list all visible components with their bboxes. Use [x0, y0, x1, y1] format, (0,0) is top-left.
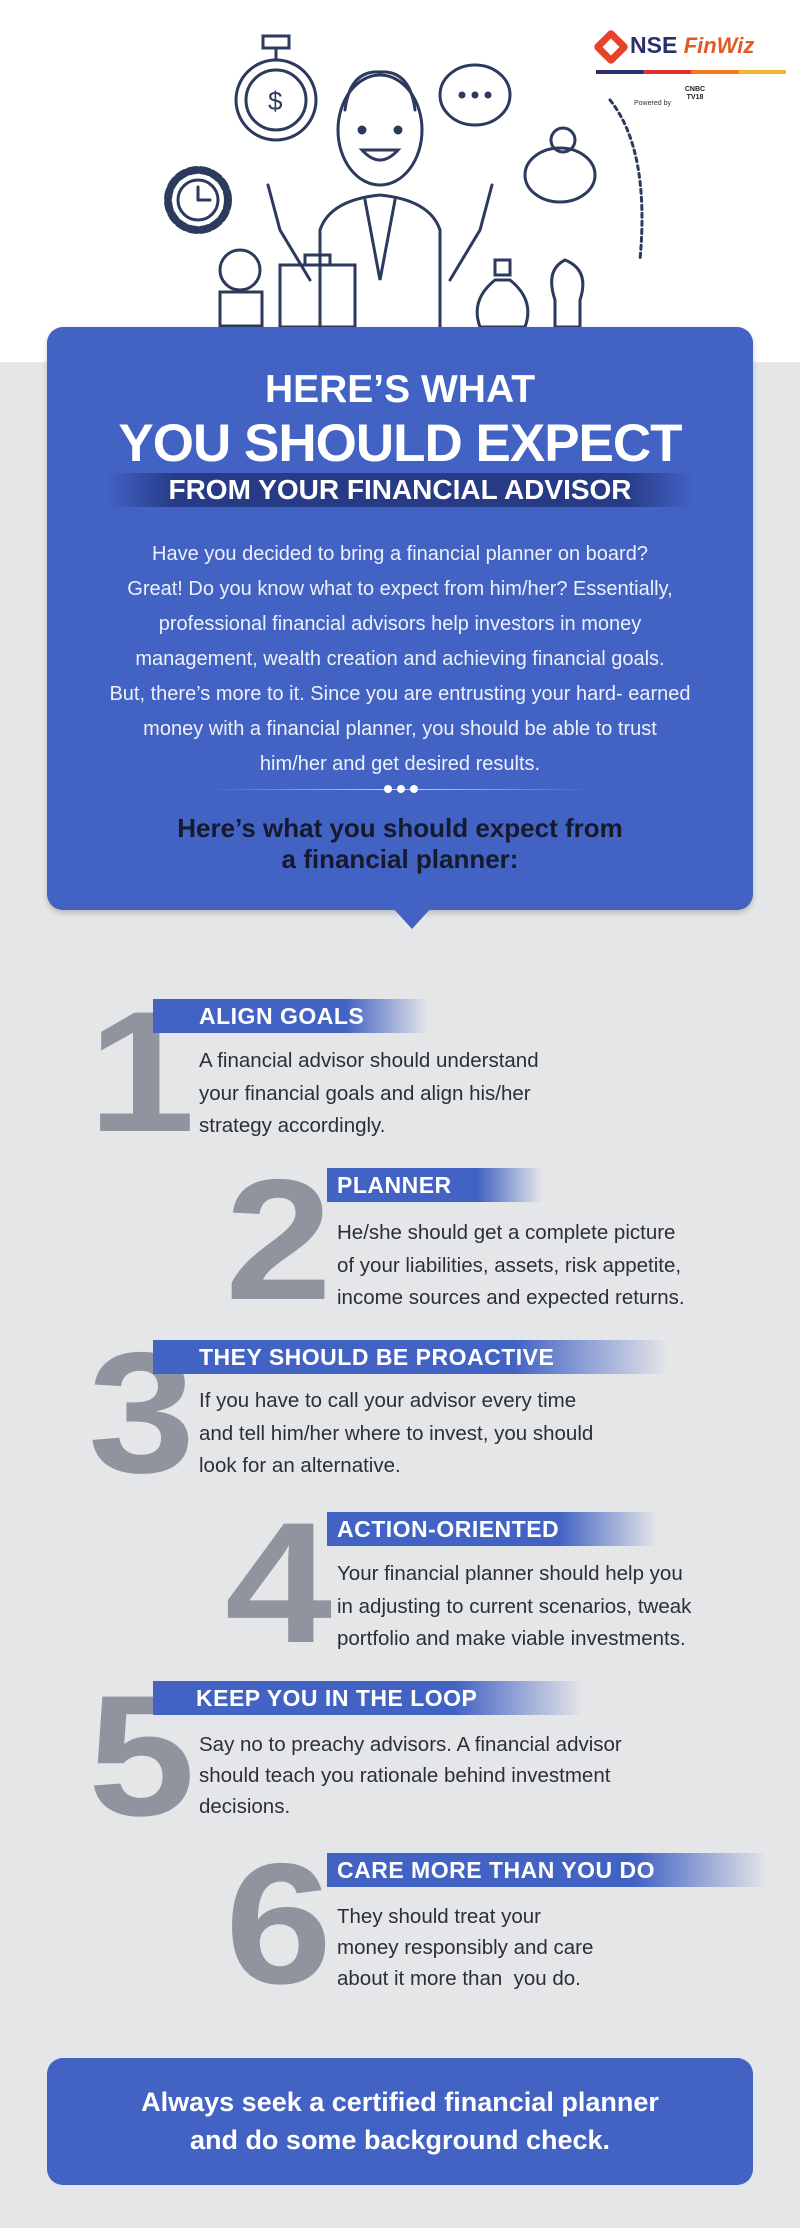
gear clock: [168, 170, 228, 230]
banner 4: [327, 1512, 657, 1546]
item 5: 5: [88, 1660, 191, 1852]
top white area: [0, 0, 800, 362]
text 2: income sources and expected returns.: [337, 1286, 685, 1309]
panel: intro: [47, 327, 753, 910]
intro paragraph: Great! Do you know what to expect from him/her? Essentially,: [127, 578, 673, 600]
coins stack: [220, 250, 262, 326]
text 1: A financial advisor should understand: [199, 1049, 539, 1072]
item 1: [88, 976, 539, 1168]
subtitle band: FROM YOUR FINANCIAL ADVISOR: [168, 474, 632, 505]
chess knight: [552, 260, 583, 327]
divider with dots: [207, 789, 593, 790]
item 2: [225, 1144, 685, 1336]
text: Powered by: [634, 100, 671, 107]
text 3: and tell him/her where to invest, you should: [199, 1422, 593, 1444]
lead-in heading: Here’s what you should expect from: [177, 813, 623, 843]
footer callout: Always seek a certified financial planner: [141, 2087, 659, 2117]
logo: NSE FinWiz: CNBC: [685, 86, 705, 93]
intro paragraph: [109, 543, 691, 775]
illustration: advisor with finance icons: [164, 34, 644, 327]
stopwatch: [236, 36, 316, 140]
text 4: [337, 1562, 692, 1650]
intro paragraph: him/her and get desired results.: [260, 753, 540, 775]
intro paragraph: management, wealth creation and achieving financial goals.: [135, 648, 665, 670]
briefcase: [280, 255, 355, 327]
banner 6: [327, 1853, 767, 1887]
item 6: [225, 1828, 760, 2020]
text 6: money responsibly and care: [337, 1936, 593, 1959]
text 5: [199, 1733, 622, 1818]
speech bubble: [440, 65, 510, 125]
logo: NSE FinWiz: TV18: [687, 94, 703, 101]
text 2: [337, 1221, 685, 1309]
item 2: 2: [225, 1144, 328, 1336]
text 6: about it more than you do.: [337, 1967, 581, 1990]
text 2: of your liabilities, assets, risk appetite,: [337, 1254, 681, 1276]
intro paragraph: But, there’s more to it. Since you are entrusting your hard- earned: [109, 683, 691, 705]
logo: NSE FinWiz: NSE FinWiz: [630, 32, 754, 58]
banner 4: ACTION-ORIENTED: [337, 1516, 559, 1542]
banner 2: PLANNER: [337, 1172, 452, 1198]
text 1: [199, 1049, 539, 1137]
piggy bank: [525, 100, 642, 260]
item 4: 4: [225, 1487, 328, 1679]
title: YOU SHOULD EXPECT: [118, 414, 682, 473]
pointer tail: [392, 907, 432, 929]
item 3: 3: [88, 1317, 191, 1509]
intro paragraph: Have you decided to bring a financial planner on board?: [152, 543, 648, 565]
banner 6: CARE MORE THAN YOU DO: [337, 1857, 655, 1883]
footer callout: [47, 2058, 753, 2185]
money bag: [477, 260, 528, 327]
title: HERE’S WHAT: [265, 368, 535, 411]
text 6: They should treat your: [337, 1905, 541, 1928]
banner 3: THEY SHOULD BE PROACTIVE: [199, 1344, 554, 1370]
item 5: [88, 1660, 622, 1852]
stopwatch: $: [268, 86, 283, 116]
person: [268, 72, 492, 330]
text 5: Say no to preachy advisors. A financial advisor: [199, 1733, 622, 1756]
text 3: If you have to call your advisor every time: [199, 1389, 576, 1412]
text 3: [199, 1389, 593, 1477]
intro paragraph: professional financial advisors help investors in money: [159, 613, 641, 635]
text 5: should teach you rationale behind investment: [199, 1764, 610, 1787]
title: [118, 368, 682, 473]
item 6: 6: [225, 1828, 328, 2020]
banner 2: [327, 1168, 542, 1202]
text 2: He/she should get a complete picture: [337, 1221, 675, 1244]
banner 1: ALIGN GOALS: [199, 1003, 364, 1029]
banner 3: [153, 1340, 668, 1374]
text 5: decisions.: [199, 1795, 290, 1818]
item 1: 1: [88, 976, 191, 1168]
footer callout: and do some background check.: [190, 2125, 610, 2155]
text 4: Your financial planner should help you: [337, 1562, 683, 1585]
text 1: your financial goals and align his/her: [199, 1082, 531, 1104]
banner 5: KEEP YOU IN THE LOOP: [196, 1685, 477, 1711]
logo: NSE FinWiz: [594, 30, 786, 107]
item 3: [88, 1317, 660, 1509]
lead-in heading: a financial planner:: [282, 844, 518, 874]
banner 1: [153, 999, 428, 1033]
banner 5: [153, 1681, 583, 1715]
intro paragraph: money with a financial planner, you should be able to trust: [143, 718, 657, 740]
text 3: look for an alternative.: [199, 1454, 401, 1477]
text 4: in adjusting to current scenarios, tweak: [337, 1594, 691, 1618]
text 4: portfolio and make viable investments.: [337, 1627, 686, 1650]
item 4: [225, 1487, 692, 1679]
text 1: strategy accordingly.: [199, 1114, 385, 1137]
text 6: [337, 1905, 593, 1990]
lead-in heading: [177, 813, 623, 874]
